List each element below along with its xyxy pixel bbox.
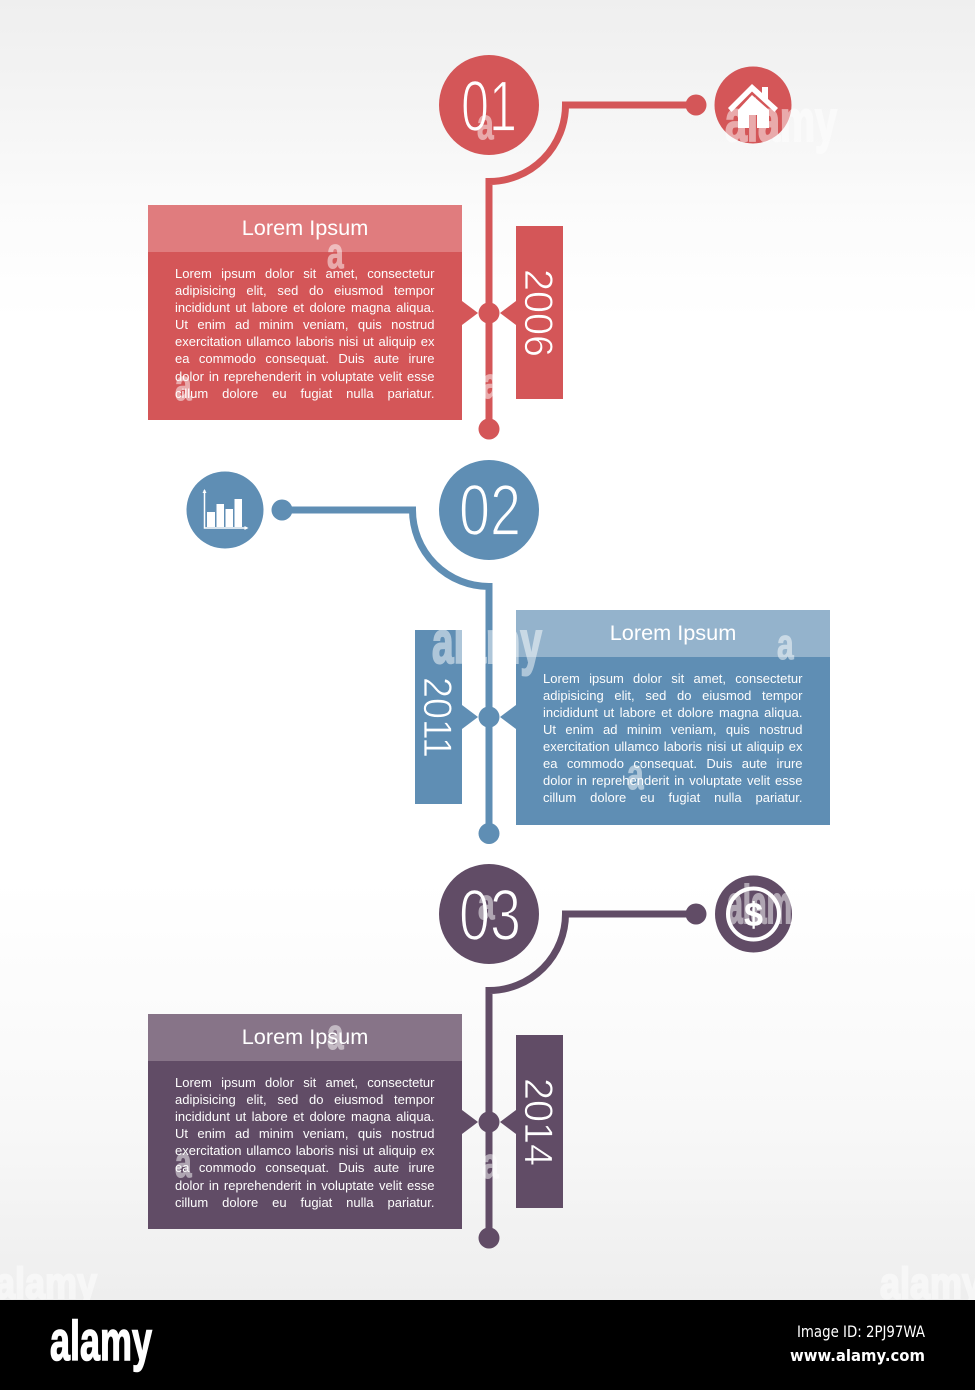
heading: milestone 1: Lorem Ipsum bbox=[242, 215, 368, 240]
connector end dot 3 bbox=[686, 904, 706, 924]
watermark: alamy letters: alamy bbox=[432, 609, 542, 676]
number badge 01: 01 bbox=[461, 67, 517, 147]
watermark: alamy letters: a bbox=[482, 358, 499, 407]
heading: milestone 2: Lorem Ipsum bbox=[610, 620, 736, 644]
connector end dot 2 bbox=[272, 500, 292, 520]
watermark: alamy letters: a bbox=[482, 1138, 499, 1187]
connector line 3 bbox=[489, 914, 696, 1238]
number badge 02: 02 bbox=[459, 471, 521, 551]
icon: house bbox=[714, 66, 792, 144]
watermark: alamy letters: a bbox=[327, 228, 344, 277]
year label 2014 bbox=[516, 1035, 563, 1208]
text block: milestone 2 body: dolor in reprehenderit in voluptate velit esse bbox=[543, 773, 802, 788]
connector line 2 bbox=[282, 510, 489, 833]
text block: milestone 3 body: cillum dolore eu fugiat nulla pariatur. bbox=[175, 1195, 434, 1210]
timeline end dot 1 bbox=[478, 418, 500, 440]
text block: milestone 2 body bbox=[543, 670, 802, 805]
text block: milestone 1 body bbox=[175, 266, 434, 401]
number badge 03: 03 bbox=[459, 876, 521, 956]
text block: milestone 2 body: incididunt ut labore et dolore magna aliqua. bbox=[543, 705, 802, 720]
text block: milestone 2 body: Lorem ipsum dolor sit amet, consectetur bbox=[543, 670, 802, 686]
connector line 1 bbox=[489, 105, 696, 429]
watermark: alamy letters: a bbox=[327, 1009, 344, 1058]
watermark: alamy letters: a bbox=[627, 749, 644, 798]
number badge 01 bbox=[439, 55, 539, 155]
text block: milestone 1 body: dolor in reprehenderit in voluptate velit esse bbox=[175, 369, 434, 384]
heading: milestone 1 bbox=[148, 205, 462, 252]
timeline end dot 3 bbox=[478, 1228, 500, 1248]
timeline node 1 with pointers bbox=[462, 301, 516, 325]
text block: milestone 1 body: cillum dolore eu fugiat nulla pariatur. bbox=[175, 386, 434, 401]
text block: milestone 2 body: adipisicing elit, sed do eiusmod tempor bbox=[543, 688, 802, 703]
text block: milestone 1 body: incididunt ut labore et dolore magna aliqua. bbox=[175, 300, 434, 315]
icon: dollar coin bbox=[715, 876, 792, 952]
panel: milestone 1 text box bbox=[148, 205, 462, 420]
text block: milestone 3 body bbox=[175, 1075, 434, 1210]
footer image id: Image ID: 2PJ97WA bbox=[797, 1322, 925, 1341]
icon: bar chart bbox=[186, 472, 264, 548]
text block: milestone 3 body: adipisicing elit, sed do eiusmod tempor bbox=[175, 1092, 434, 1107]
text block: milestone 1 body: Ut enim ad minim veniam, quis nostrud bbox=[175, 317, 434, 332]
text block: milestone 1 body: adipisicing elit, sed do eiusmod tempor bbox=[175, 283, 434, 298]
icon: dollar coin: $ bbox=[744, 896, 763, 933]
text block: milestone 1 body: exercitation ullamco laboris nisi ut aliquip ex bbox=[175, 334, 434, 349]
watermark: alamy letters: a bbox=[777, 619, 794, 668]
heading: milestone 2 bbox=[516, 610, 830, 656]
text block: milestone 3 body: Lorem ipsum dolor sit amet, consectetur bbox=[175, 1075, 434, 1090]
year label 2006: 2006 bbox=[516, 269, 560, 357]
timeline segment 3 bbox=[439, 864, 792, 1248]
text block: milestone 2 body: Ut enim ad minim veniam, quis nostrud bbox=[543, 722, 802, 737]
text block: milestone 3 body: ea commodo consequat. Duis aute irure bbox=[175, 1160, 434, 1175]
timeline node 3 with pointers bbox=[462, 1110, 516, 1134]
footer bar bbox=[0, 1300, 975, 1390]
panel: milestone 2 text box bbox=[516, 610, 830, 824]
timeline segment 1 bbox=[439, 55, 792, 440]
watermark: alamy letters: alamy bbox=[725, 89, 837, 154]
watermark: alamy letters: a bbox=[175, 1137, 192, 1186]
watermark: alamy letters: a bbox=[477, 99, 494, 148]
heading: milestone 3 bbox=[148, 1014, 462, 1061]
number badge 03 bbox=[439, 864, 539, 964]
connector end dot 1 bbox=[686, 94, 706, 116]
text block: milestone 2 body: exercitation ullamco laboris nisi ut aliquip ex bbox=[543, 739, 802, 754]
footer website: www.alamy.com bbox=[790, 1346, 925, 1365]
text block: milestone 1 body: ea commodo consequat. Duis aute irure bbox=[175, 351, 434, 366]
timeline end dot 2 bbox=[478, 823, 500, 844]
year label 2006 bbox=[516, 226, 563, 399]
text block: milestone 3 body: exercitation ullamco laboris nisi ut aliquip ex bbox=[175, 1143, 434, 1158]
number badge 02 bbox=[439, 460, 539, 560]
text block: milestone 3 body: dolor in reprehenderit in voluptate velit esse bbox=[175, 1178, 434, 1193]
year label 2011: 2011 bbox=[415, 677, 459, 758]
text block: milestone 2 body: cillum dolore eu fugiat nulla pariatur. bbox=[543, 790, 802, 805]
footer logo: alamy bbox=[50, 1309, 152, 1372]
text block: milestone 2 body: ea commodo consequat. Duis aute irure bbox=[543, 756, 802, 771]
year label 2011 bbox=[415, 630, 462, 804]
watermark: alamy letters: a bbox=[478, 879, 495, 928]
year label 2014: 2014 bbox=[516, 1078, 560, 1166]
timeline segment 2 bbox=[186, 460, 539, 844]
text block: milestone 3 body: Ut enim ad minim veniam, quis nostrud bbox=[175, 1126, 434, 1141]
text block: milestone 1 body: Lorem ipsum dolor sit amet, consectetur bbox=[175, 266, 434, 281]
watermark: alamy letters: a bbox=[175, 360, 192, 409]
heading: milestone 3: Lorem Ipsum bbox=[242, 1024, 368, 1049]
timeline node 2 with pointers bbox=[462, 705, 516, 729]
text block: milestone 3 body: incididunt ut labore et dolore magna aliqua. bbox=[175, 1109, 434, 1124]
watermark: alamy letters: alam bbox=[727, 875, 792, 935]
panel: milestone 3 text box bbox=[148, 1014, 462, 1229]
